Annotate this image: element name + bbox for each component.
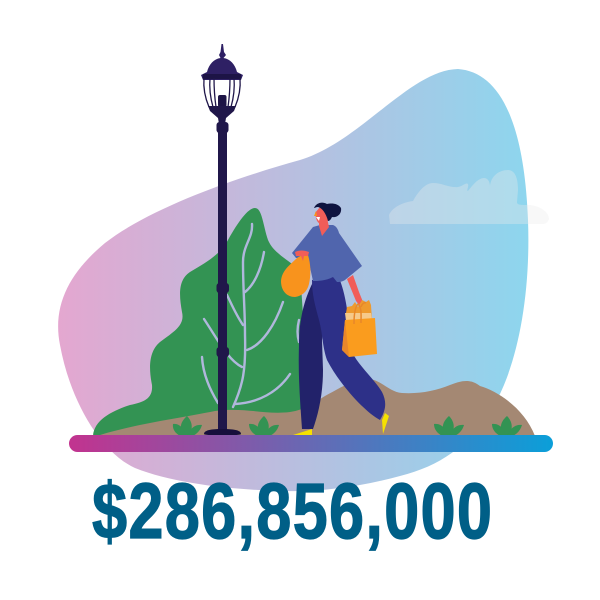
face (315, 207, 328, 224)
ground hills (97, 379, 535, 436)
hand (295, 250, 309, 261)
back leg (299, 282, 328, 429)
hair (314, 203, 341, 221)
plant 3 (434, 416, 464, 437)
tree (93, 208, 310, 436)
orange bag (281, 255, 310, 297)
shopping bag (342, 300, 377, 357)
neck (319, 218, 329, 236)
woman shopper (281, 203, 389, 435)
shirt (292, 225, 362, 282)
nose (314, 211, 317, 216)
background gradient blob (58, 69, 528, 491)
leaf veins (202, 224, 299, 407)
front leg (312, 276, 385, 420)
plants (173, 416, 522, 437)
street lamp (201, 44, 243, 436)
plant 1 (173, 416, 202, 437)
gradient ground bar (69, 435, 553, 452)
bread (346, 300, 372, 320)
cloud (389, 170, 549, 224)
dollar amount: $286,856,000 (92, 467, 492, 556)
far arm (347, 275, 363, 306)
plant 2 (249, 416, 279, 437)
smile (316, 217, 320, 221)
plant 4 (492, 416, 522, 437)
shoes (293, 429, 312, 435)
